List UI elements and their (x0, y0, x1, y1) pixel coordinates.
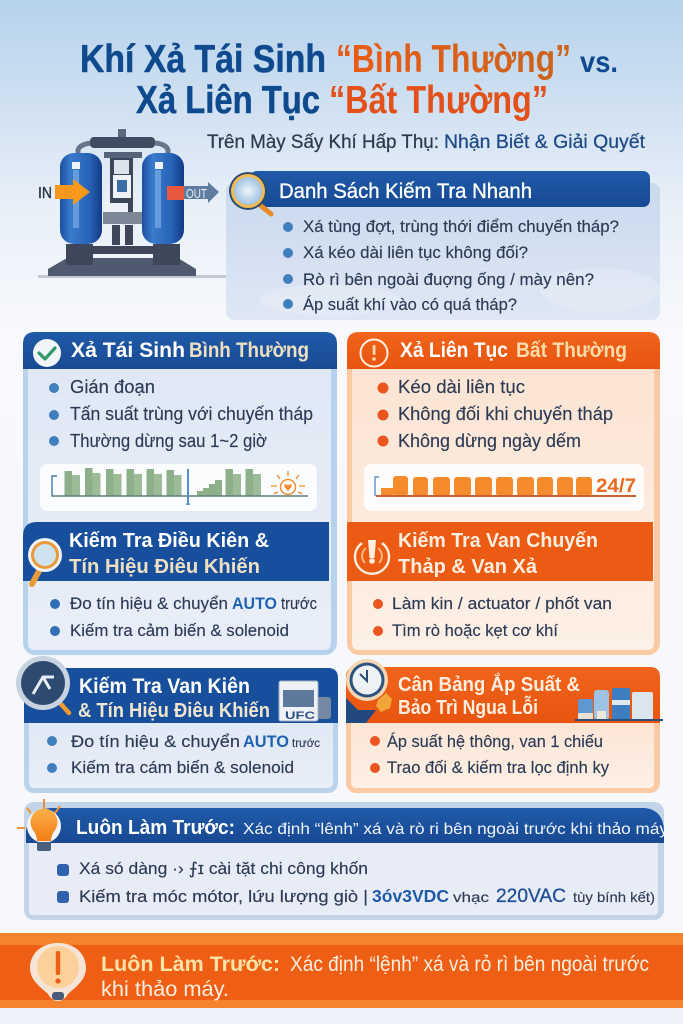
icon: filter bottles (575, 688, 663, 721)
pressure balance list: Trao đối & kiếm tra lọc định ky (387, 759, 610, 777)
subtitle (207, 132, 646, 153)
subtitle: Nhận Biết & Giải Quyết (444, 132, 646, 153)
icon: alert bulb (30, 943, 86, 1001)
panel: pressure balance (346, 659, 663, 793)
condition check list: trước (281, 595, 317, 613)
normal purge heading: Bình Thường (189, 338, 309, 362)
condition check list: Đo tín hiệu & chuyển (70, 595, 228, 613)
valve check header: Thảp & Van Xả (398, 555, 538, 578)
icon: alert ring (355, 540, 389, 574)
always do first list: Kiếm tra móc mótor, lứu lượng giò | (79, 888, 368, 906)
checklist items: Rò rì bên ngoài đuợng ống / mày nên? (303, 271, 594, 289)
panel: abnormal purge (347, 332, 660, 655)
title: “Bất Thường” (329, 79, 548, 122)
checklist header bar (250, 171, 650, 207)
icon: adsorption dryer with in/out arrows: OUT (186, 186, 207, 201)
pressure balance header (346, 667, 660, 723)
always do first heading: Xác định “lênh” xá và rò ri bên ngoài trước khi thảo máy (243, 821, 668, 838)
solenoid check header (24, 668, 338, 723)
always do first list: tùy bính kết) (573, 889, 655, 905)
condition check list (50, 595, 317, 640)
checklist items (283, 218, 619, 314)
chart: intermittent purge (40, 464, 317, 511)
checklist items: Xá tùng đợt, trùng thới điểm chuyến tháp? (303, 218, 619, 236)
abnormal purge list: Không dừng ngày dếm (398, 431, 581, 451)
normal purge list (49, 377, 313, 451)
title (80, 38, 618, 122)
icon: clock and wrench (346, 659, 392, 723)
condition check list: AUTO (232, 595, 277, 613)
always do first list: vhạc (453, 889, 489, 905)
valve check list: Làm kin / actuator / phốt van (392, 595, 612, 613)
normal purge header (23, 332, 337, 369)
valve check header (347, 522, 653, 581)
pressure balance heading: Bảo Trì Ngua Lỗi (398, 695, 538, 719)
panel: quick checklist (226, 171, 660, 320)
panel: always do first (17, 799, 668, 920)
valve check header: Kiếm Tra Van Chuyến (398, 529, 598, 552)
icon: large magnifier (16, 656, 70, 713)
abnormal purge list: Không đối khi chuyến tháp (398, 404, 613, 424)
pressure balance heading (398, 672, 580, 719)
checklist heading: Danh Sách Kiếm Tra Nhanh (279, 179, 532, 203)
solenoid check list: Kiếm tra cám biến & solenoid (71, 759, 294, 777)
pressure balance heading: Cân Bảng Ắp Suất & (398, 672, 580, 696)
icon: adsorption dryer with in/out arrows: IN (38, 185, 52, 202)
normal purge list: Thường dừng sau 1~2 giờ (70, 431, 267, 451)
always do first list: 220VAC (496, 886, 566, 907)
abnormal purge heading: Xả Liên Tục (400, 338, 508, 362)
normal purge list: Tấn suất trùng với chuyến tháp (70, 404, 313, 424)
always do first heading: Luôn Làm Trước: (76, 817, 235, 839)
title: Khí Xả Tái Sinh (80, 38, 326, 81)
icon: light bulb (17, 799, 61, 851)
abnormal purge list: Kéo dài liên tục (398, 377, 525, 397)
condition check list: Kiếm tra cảm biến & solenoid (70, 622, 289, 640)
icon: alert (360, 340, 388, 366)
pressure balance list: Áp suất hệ thông, van 1 chiếu (387, 732, 603, 751)
abnormal purge heading: Bất Thường (516, 338, 627, 362)
solenoid check list: AUTO (243, 732, 289, 751)
chart: continuous purge: 24/7 (596, 476, 636, 497)
valve check list: Tìm rò hoặc kẹt cơ khí (392, 622, 558, 640)
icon: adsorption dryer with in/out arrows (38, 129, 226, 278)
icon: magnifier (28, 538, 62, 584)
solenoid check heading: & Tín Hiệu Điêu Khiến (78, 700, 270, 722)
solenoid check heading (78, 675, 270, 722)
normal purge heading (71, 338, 309, 362)
banner text: Xác định “lệnh” xá và rỏ rì bên ngoài trước (290, 953, 649, 976)
bottom orange banner (0, 933, 683, 1024)
valve check list (373, 595, 612, 640)
icon: controller unit: UFC (285, 710, 315, 722)
panel: normal purge (23, 332, 337, 655)
title: “Bình Thường” (336, 38, 571, 81)
solenoid check list (47, 732, 320, 777)
condition check header: Kiếm Tra Điều Kiên & (69, 529, 269, 552)
always do first heading (76, 817, 668, 839)
banner text (101, 953, 649, 1001)
pressure balance list (370, 732, 610, 777)
solenoid check list: Đo tín hiệu & chuyển (71, 733, 240, 751)
condition check header (23, 522, 329, 584)
always do first list: Xá só dàng ·› ⨍ɪ cài tặt chi công khốn (79, 860, 368, 878)
subtitle: Trên Mày Sấy Khí Hấp Thụ: (207, 132, 439, 153)
solenoid check list: trước (292, 736, 320, 750)
icon: controller unit (279, 681, 331, 722)
abnormal purge list (378, 377, 613, 451)
icon: magnifier (229, 172, 271, 214)
checklist items: Xá kéo dài liên tục không đối? (303, 244, 528, 262)
abnormal purge header (347, 332, 660, 369)
title: Xả Liên Tục (136, 79, 320, 122)
always do first list: 3óv3VDC (372, 886, 449, 906)
always do first header (26, 808, 664, 843)
always do first list (57, 860, 655, 907)
panel: solenoid check (16, 656, 338, 793)
condition check header: Tín Hiệu Điêu Khiến (69, 555, 260, 578)
banner text: khi thảo máy. (101, 978, 229, 1001)
normal purge heading: Xả Tái Sinh (71, 338, 185, 362)
title: vs. (580, 46, 618, 79)
abnormal purge heading (400, 338, 627, 362)
normal purge list: Gián đoạn (70, 377, 155, 397)
banner text: Luôn Làm Trước: (101, 953, 280, 976)
chart: continuous purge (364, 464, 644, 511)
icon: check (33, 339, 61, 367)
checklist items: Áp suất khí vào có quá tháp? (303, 295, 517, 314)
solenoid check heading: Kiếm Tra Van Kiên (79, 675, 250, 698)
